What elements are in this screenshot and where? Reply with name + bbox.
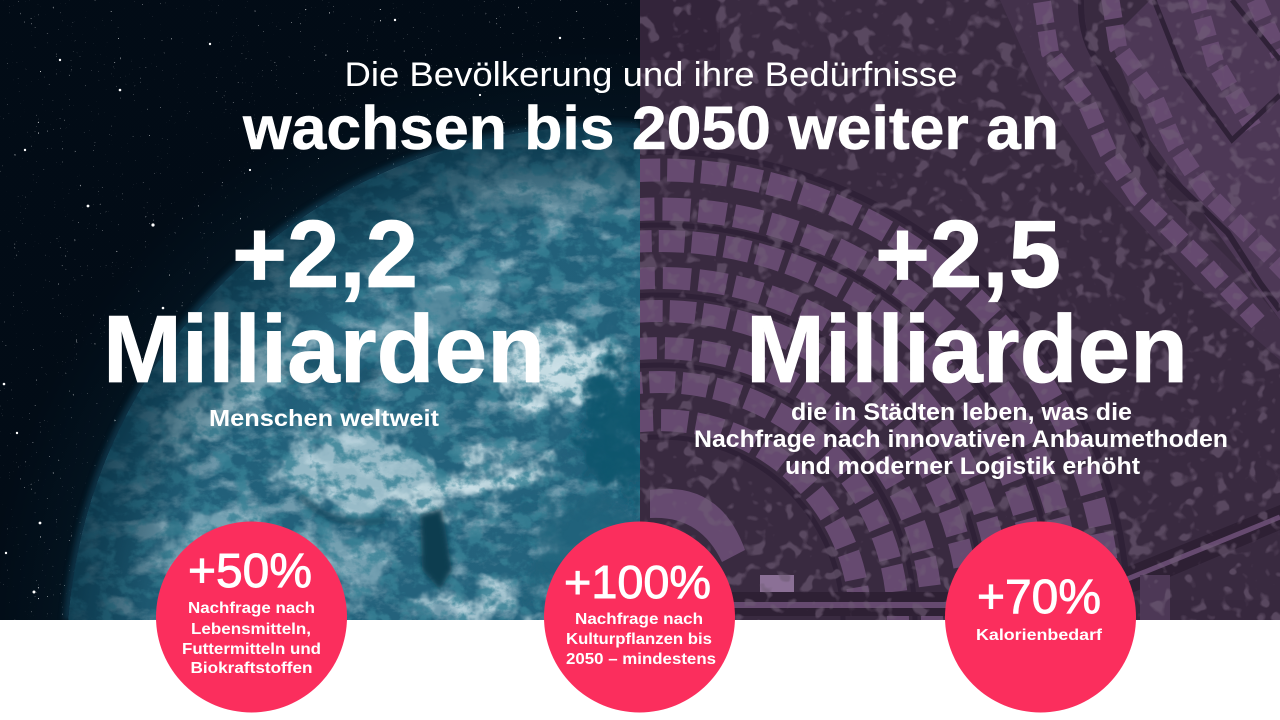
panel: aerial suburb photo (640, 0, 1280, 620)
value: +70% (977, 571, 1101, 624)
description: Lebensmitteln, (191, 621, 311, 638)
description (566, 611, 716, 668)
description: Kalorienbedarf (976, 627, 1103, 644)
panel: earth in space photo (0, 0, 650, 620)
caption: und moderner Logistik erhöht (785, 453, 1140, 480)
stat: plus 2.2 billion people (103, 201, 545, 431)
title line 1: Die Bevölkerung und ihre Bedürfnisse (344, 56, 958, 94)
circle: plus 70 percent (945, 522, 1136, 712)
description (182, 600, 321, 677)
description: Biokraftstoffen (190, 660, 312, 677)
value: +50% (188, 545, 312, 598)
caption: die in Städten leben, was die (791, 399, 1132, 426)
value: +100% (564, 556, 711, 608)
description: Nachfrage nach (188, 600, 315, 617)
stat: plus 2.5 billion in cities (694, 201, 1228, 480)
unit: Milliarden (746, 296, 1188, 403)
circle: plus 100 percent (544, 522, 735, 712)
unit: Milliarden (103, 296, 545, 403)
title (242, 56, 1059, 162)
number: +2,2 (232, 201, 418, 308)
caption: Nachfrage nach innovativen Anbaumethoden (694, 426, 1228, 453)
number: +2,5 (875, 201, 1061, 308)
description: Nachfrage nach (575, 611, 703, 628)
title line 2: wachsen bis 2050 weiter an (242, 94, 1059, 162)
caption (694, 399, 1228, 480)
circle: plus 50 percent (156, 522, 347, 712)
caption: Menschen weltweit (209, 405, 439, 431)
description: 2050 – mindestens (566, 651, 716, 668)
description: Kulturpflanzen bis (566, 631, 712, 648)
description: Futtermitteln und (182, 641, 321, 658)
